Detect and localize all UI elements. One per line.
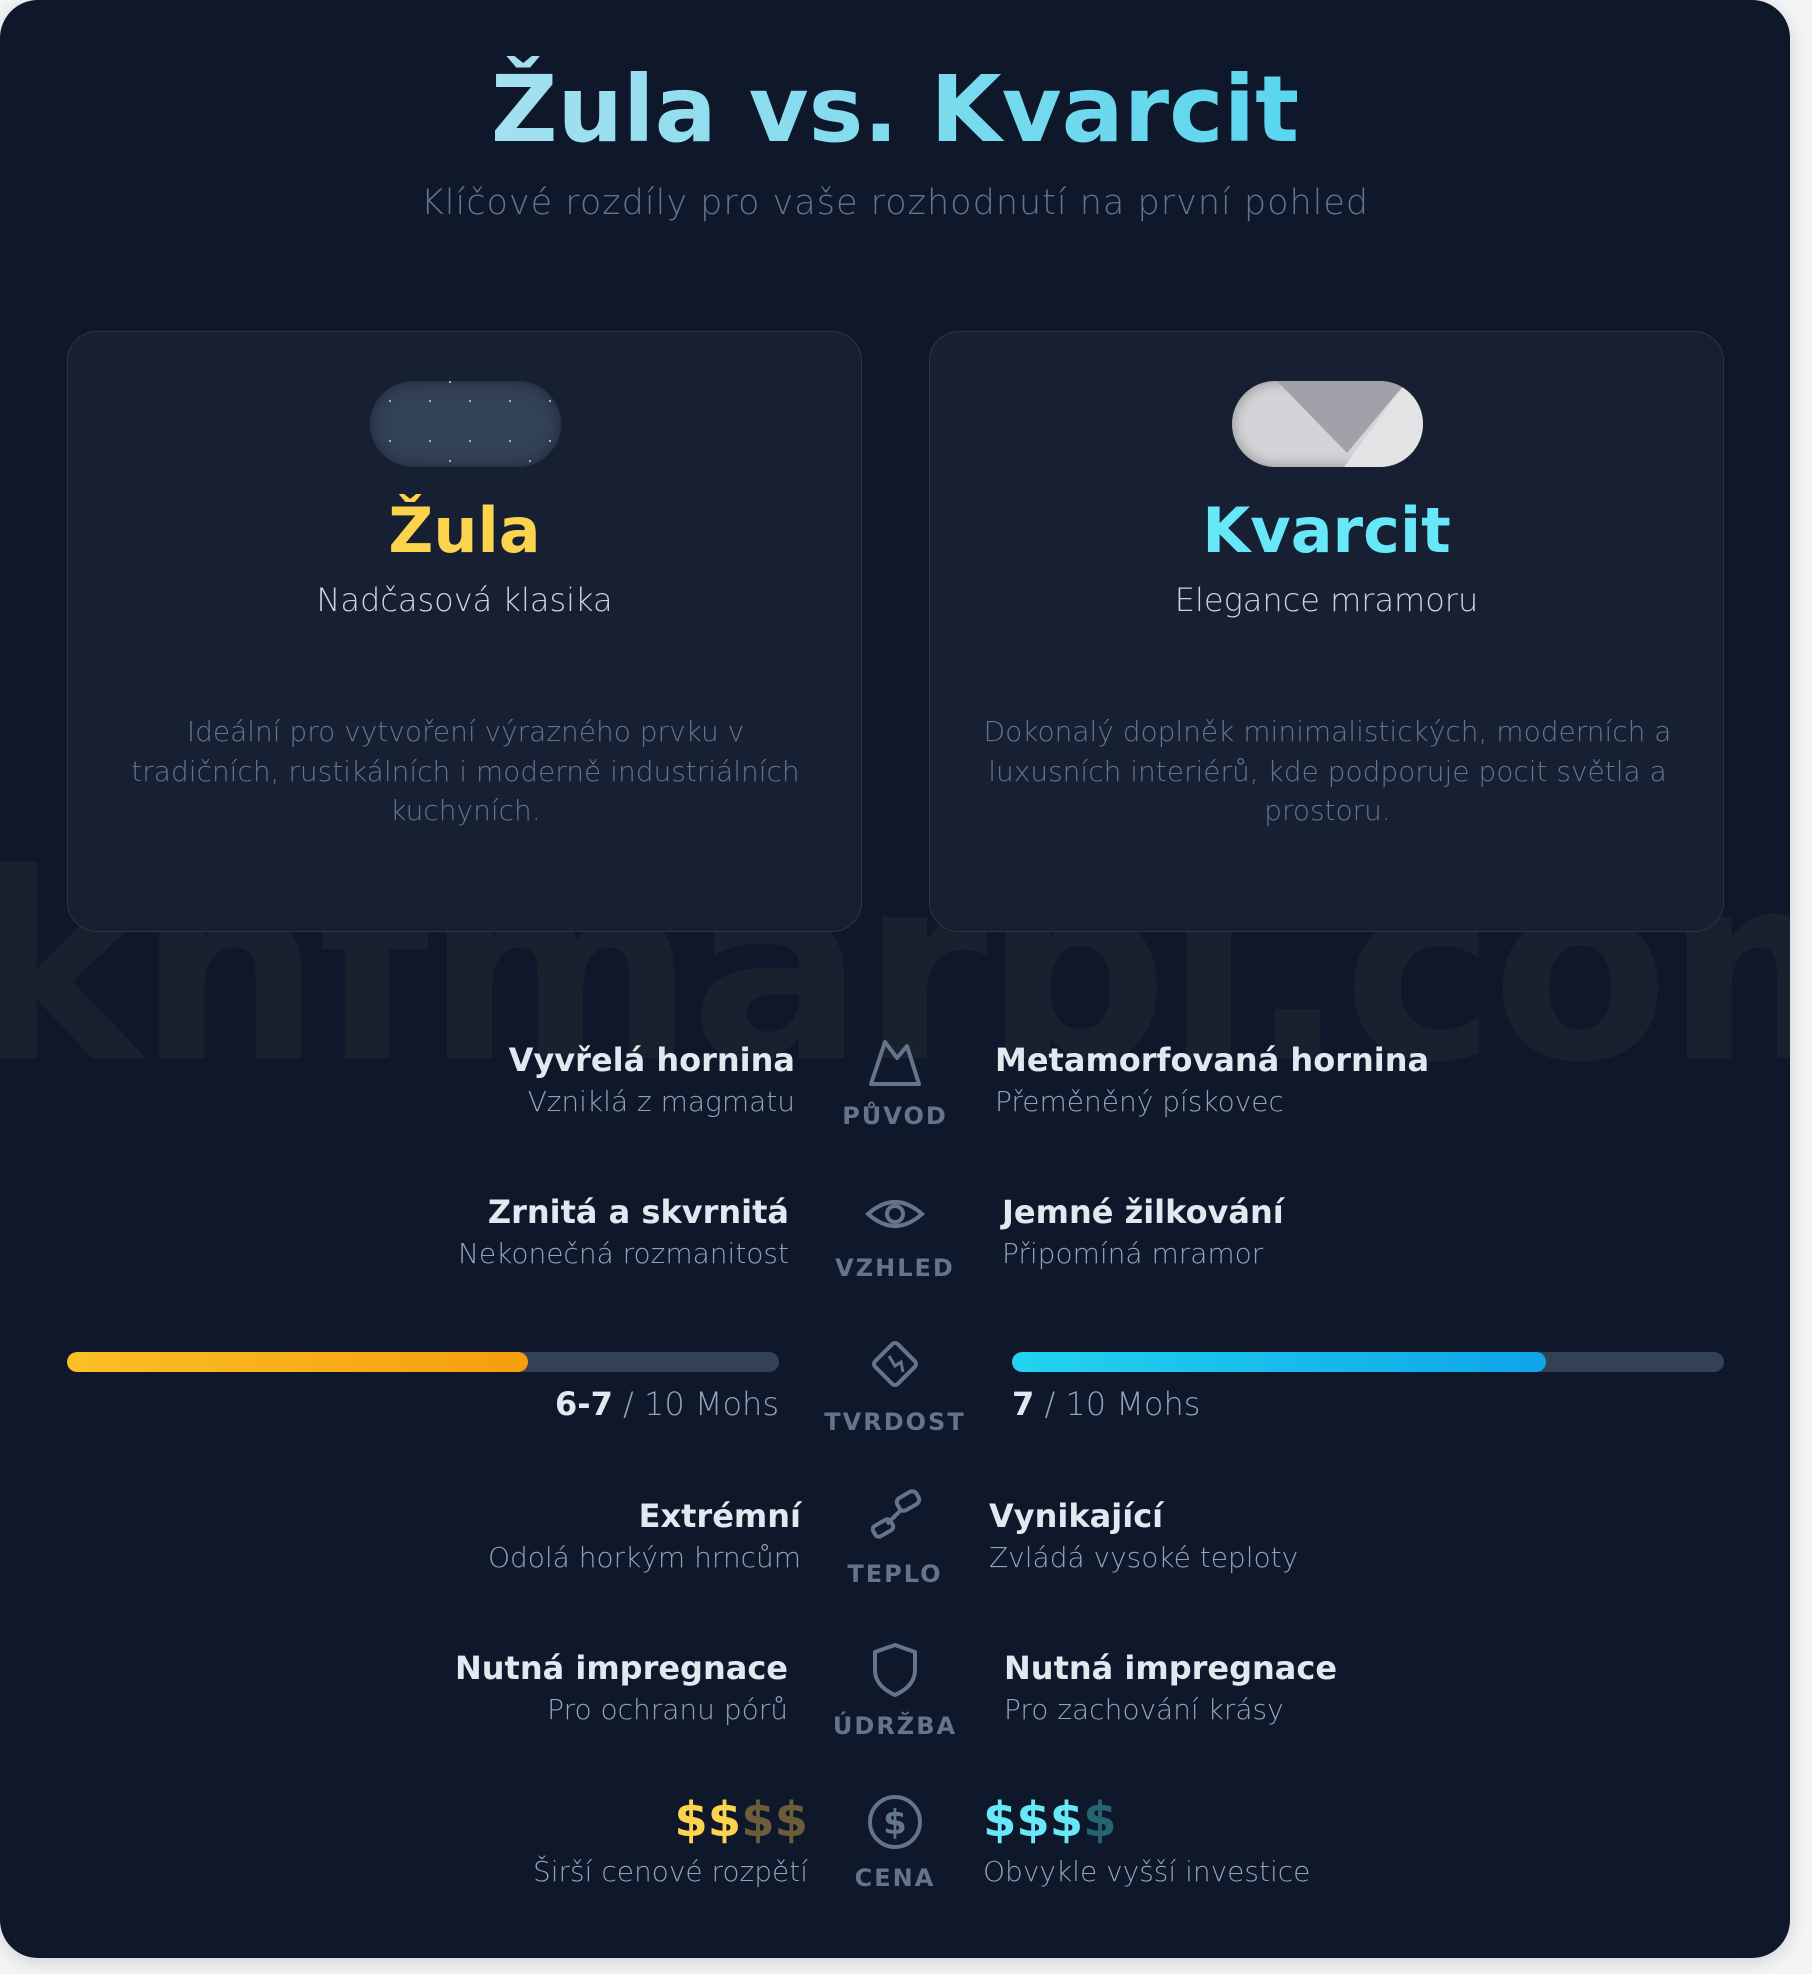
icon: dollar coin: [868, 1795, 922, 1849]
icon: pan link: [870, 1489, 922, 1539]
text: granite origin: Vyvřelá hornina: [509, 1041, 795, 1079]
text: quartzite maintenance: [1004, 1649, 1337, 1726]
text: granite appearance: Zrnitá a skvrnitá: [488, 1193, 789, 1231]
text: quartzite hardness value: 7 / 10 Mohs: [1012, 1385, 1200, 1423]
text: granite price: Širší cenové rozpětí: [533, 1855, 808, 1888]
text: quartzite price: Obvykle vyšší investice: [983, 1855, 1310, 1888]
text: description: Ideální pro vytvoření výrazného prvku v tradičních, rustikálních i moderně industriálních kuchyních.: [131, 715, 800, 827]
text: quartzite heat: Zvládá vysoké teploty: [989, 1541, 1298, 1574]
text: granite price: $$$$: [674, 1792, 808, 1848]
text: granite maintenance: Pro ochranu pórů: [547, 1693, 788, 1726]
icon: dollar coin: $: [883, 1803, 907, 1843]
bar: quartzite hardness: [1012, 1352, 1724, 1372]
label: PŮVOD: PŮVOD: [842, 1102, 948, 1130]
row: appearance: [458, 1193, 1286, 1282]
text: granite price: [533, 1792, 808, 1888]
heading: Žula: Žula: [388, 494, 541, 567]
icon: eye: [865, 1200, 925, 1228]
label: TVRDOST: TVRDOST: [824, 1408, 966, 1436]
text: quartzite maintenance: Nutná impregnace: [1004, 1649, 1337, 1687]
text: granite heat: [488, 1497, 802, 1574]
label: TEPLO: TEPLO: [847, 1560, 943, 1588]
row: price: [533, 1792, 1310, 1892]
text: granite maintenance: Nutná impregnace: [455, 1649, 788, 1687]
icon: quartzite stone: [1232, 381, 1423, 467]
text: subtitle: Nadčasová klasika: [316, 581, 613, 619]
icon: diamond ruler: [872, 1341, 918, 1387]
row: origin: [508, 1040, 1429, 1130]
text: quartzite appearance: Připomíná mramor: [1002, 1237, 1263, 1270]
text: granite heat: Odolá horkým hrncům: [488, 1541, 801, 1574]
text: quartzite appearance: Jemné žilkování: [1002, 1193, 1284, 1231]
text: granite hardness value: 6-7 / 10 Mohs: [555, 1385, 779, 1423]
text: subtitle: Elegance mramoru: [1175, 581, 1478, 619]
text: granite origin: [508, 1041, 795, 1118]
bar: granite hardness: [67, 1352, 779, 1372]
text: quartzite price: [983, 1792, 1310, 1888]
text: quartzite appearance: [1000, 1193, 1286, 1270]
label: VZHLED: VZHLED: [835, 1254, 955, 1282]
text: quartzite heat: [989, 1497, 1298, 1574]
text: quartzite origin: Přeměněný pískovec: [995, 1085, 1284, 1118]
text: quartzite origin: [995, 1041, 1429, 1118]
text: description: Dokonalý doplněk minimalistických, moderních a luxusních interiérů, kde podporuje pocit světla a prostoru.: [984, 715, 1671, 827]
text: granite maintenance: [455, 1649, 788, 1726]
row: heat: [488, 1489, 1298, 1588]
label: CENA: CENA: [855, 1864, 935, 1892]
title: Žula vs. Kvarcit: [491, 56, 1299, 163]
row: hardness: [67, 1341, 1724, 1436]
text: quartzite price: $$$$: [983, 1792, 1117, 1848]
icon: granite stone: [370, 381, 561, 467]
label: ÚDRŽBA: ÚDRŽBA: [833, 1712, 957, 1740]
icon: mountain: [869, 1040, 921, 1086]
text: granite appearance: [458, 1193, 789, 1270]
panel: granite: [67, 331, 862, 932]
text: granite origin: Vzniklá z magmatu: [528, 1085, 795, 1118]
icon: shield: [873, 1643, 917, 1697]
text: granite heat: Extrémní: [639, 1497, 801, 1535]
text: quartzite maintenance: Pro zachování krásy: [1004, 1693, 1284, 1726]
text: granite appearance: Nekonečná rozmanitost: [458, 1237, 789, 1270]
row: maintenance: [455, 1643, 1337, 1740]
subtitle: Klíčové rozdíly pro vaše rozhodnutí na první pohled: [421, 183, 1369, 223]
text: quartzite origin: Metamorfovaná hornina: [995, 1041, 1429, 1079]
text: quartzite heat: Vynikající: [989, 1497, 1163, 1535]
panel: quartzite: [929, 331, 1724, 932]
heading: Kvarcit: Kvarcit: [1202, 494, 1451, 567]
